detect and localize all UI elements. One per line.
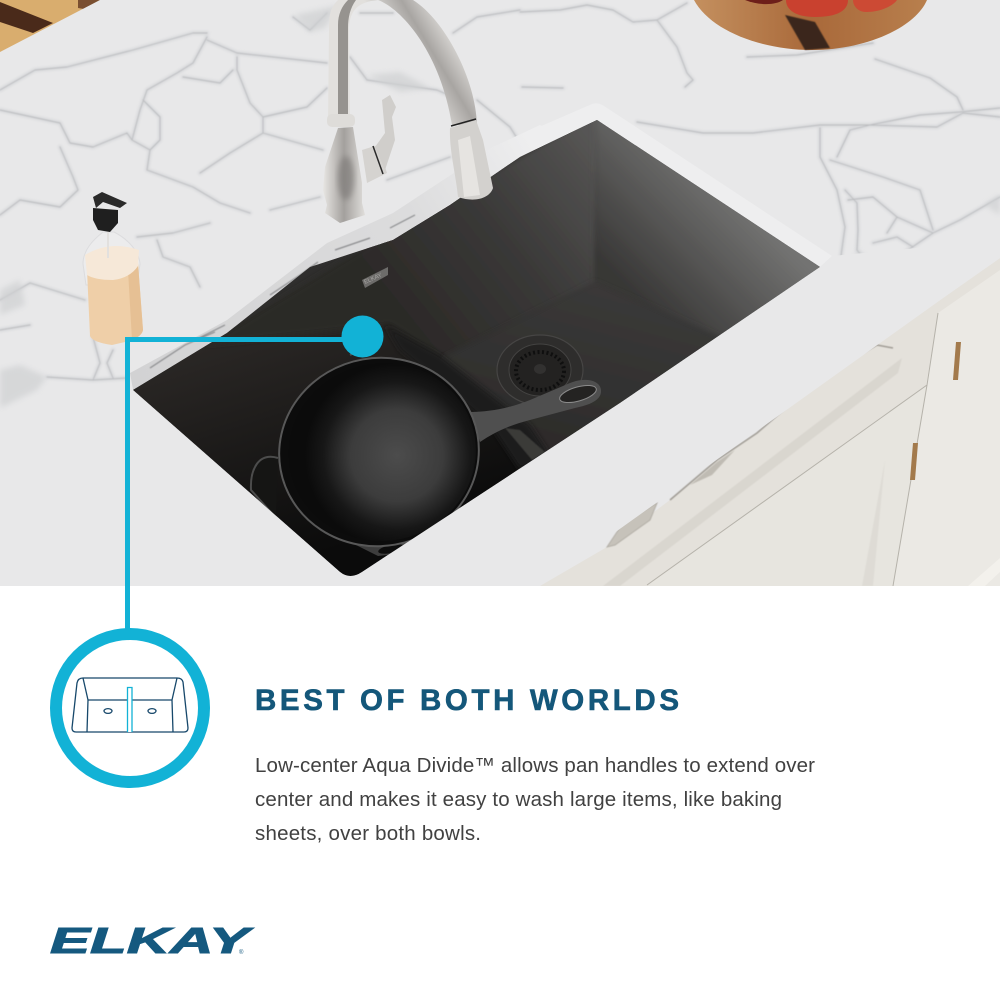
left bowl (120, 110, 600, 590)
fruit bowl (694, 0, 927, 50)
icon ring (56, 634, 204, 782)
spout arch (328, 0, 477, 125)
baseboard strip (968, 558, 1000, 586)
heading: BEST OF BOTH WORLDS (255, 684, 679, 717)
sink rim (130, 103, 832, 403)
low divide (385, 325, 548, 470)
icon sink outline (72, 678, 188, 732)
faucet (323, 0, 493, 223)
body text: Low-center Aqua Divide™ allows pan handles to extend over (255, 754, 815, 777)
pan (278, 356, 601, 556)
drain (497, 335, 583, 405)
wood floor corner (0, 0, 100, 52)
soap liquid shade (128, 264, 143, 340)
pump collar (93, 208, 118, 232)
right wall (595, 120, 820, 338)
apple right (853, 0, 897, 12)
countertop edge veins (607, 345, 893, 547)
bottle glass (83, 232, 140, 285)
marble veins halo (0, 3, 1000, 380)
marble veins (0, 3, 1000, 380)
pan back hoop (251, 457, 278, 518)
Elkay logo: ® (239, 949, 244, 956)
sink basin (133, 120, 820, 576)
callout dot (342, 316, 384, 358)
soap bottle (83, 192, 143, 345)
faucet handle (375, 95, 396, 170)
pump head (93, 192, 127, 208)
right bowl floor (470, 287, 717, 452)
back wall (205, 110, 600, 358)
body text (255, 754, 815, 845)
marble blotches (0, 5, 1000, 408)
sink logo badge: ELKAY (363, 273, 383, 286)
body text: center and makes it easy to wash large items, like baking (255, 788, 782, 811)
faucet hub (362, 145, 387, 183)
faucet body (323, 127, 365, 223)
soap liquid (87, 262, 143, 345)
hinge lower (910, 443, 918, 480)
rim veins (150, 215, 415, 368)
kitchen photo panel (0, 0, 1000, 590)
icon divider (128, 688, 132, 732)
pan body (278, 356, 480, 548)
right cabinet door (893, 270, 1000, 586)
icon: sink with low divide (56, 634, 204, 782)
pan handle hole (559, 385, 597, 403)
pan small handle (350, 354, 352, 356)
hinge upper (953, 342, 961, 380)
callout connector line (128, 340, 362, 630)
cabinet (540, 258, 1000, 586)
door panel recess (863, 478, 882, 586)
Elkay logo (50, 920, 254, 961)
faucet collar (327, 114, 355, 127)
dark apple (745, 0, 783, 4)
Elkay logo: ELKAY (50, 920, 254, 961)
recessed rail (603, 358, 902, 586)
lower door panel (647, 385, 927, 586)
pump dip tube (107, 232, 109, 258)
pan handle (470, 380, 601, 442)
pan inner surface (319, 378, 475, 534)
spray head (450, 120, 493, 200)
front counter over sink edge (133, 248, 914, 576)
countertop (0, 0, 1000, 586)
soap liquid top (85, 246, 139, 280)
sink logo badge (362, 267, 388, 288)
pan lip bottom (356, 543, 406, 556)
apple left (786, 0, 848, 17)
body shadow (338, 156, 354, 200)
neck shade (338, 0, 356, 125)
rim veined band (130, 136, 518, 390)
body text: sheets, over both bowls. (255, 822, 481, 845)
wood grain streak (785, 15, 830, 50)
countertop edge (542, 429, 760, 584)
